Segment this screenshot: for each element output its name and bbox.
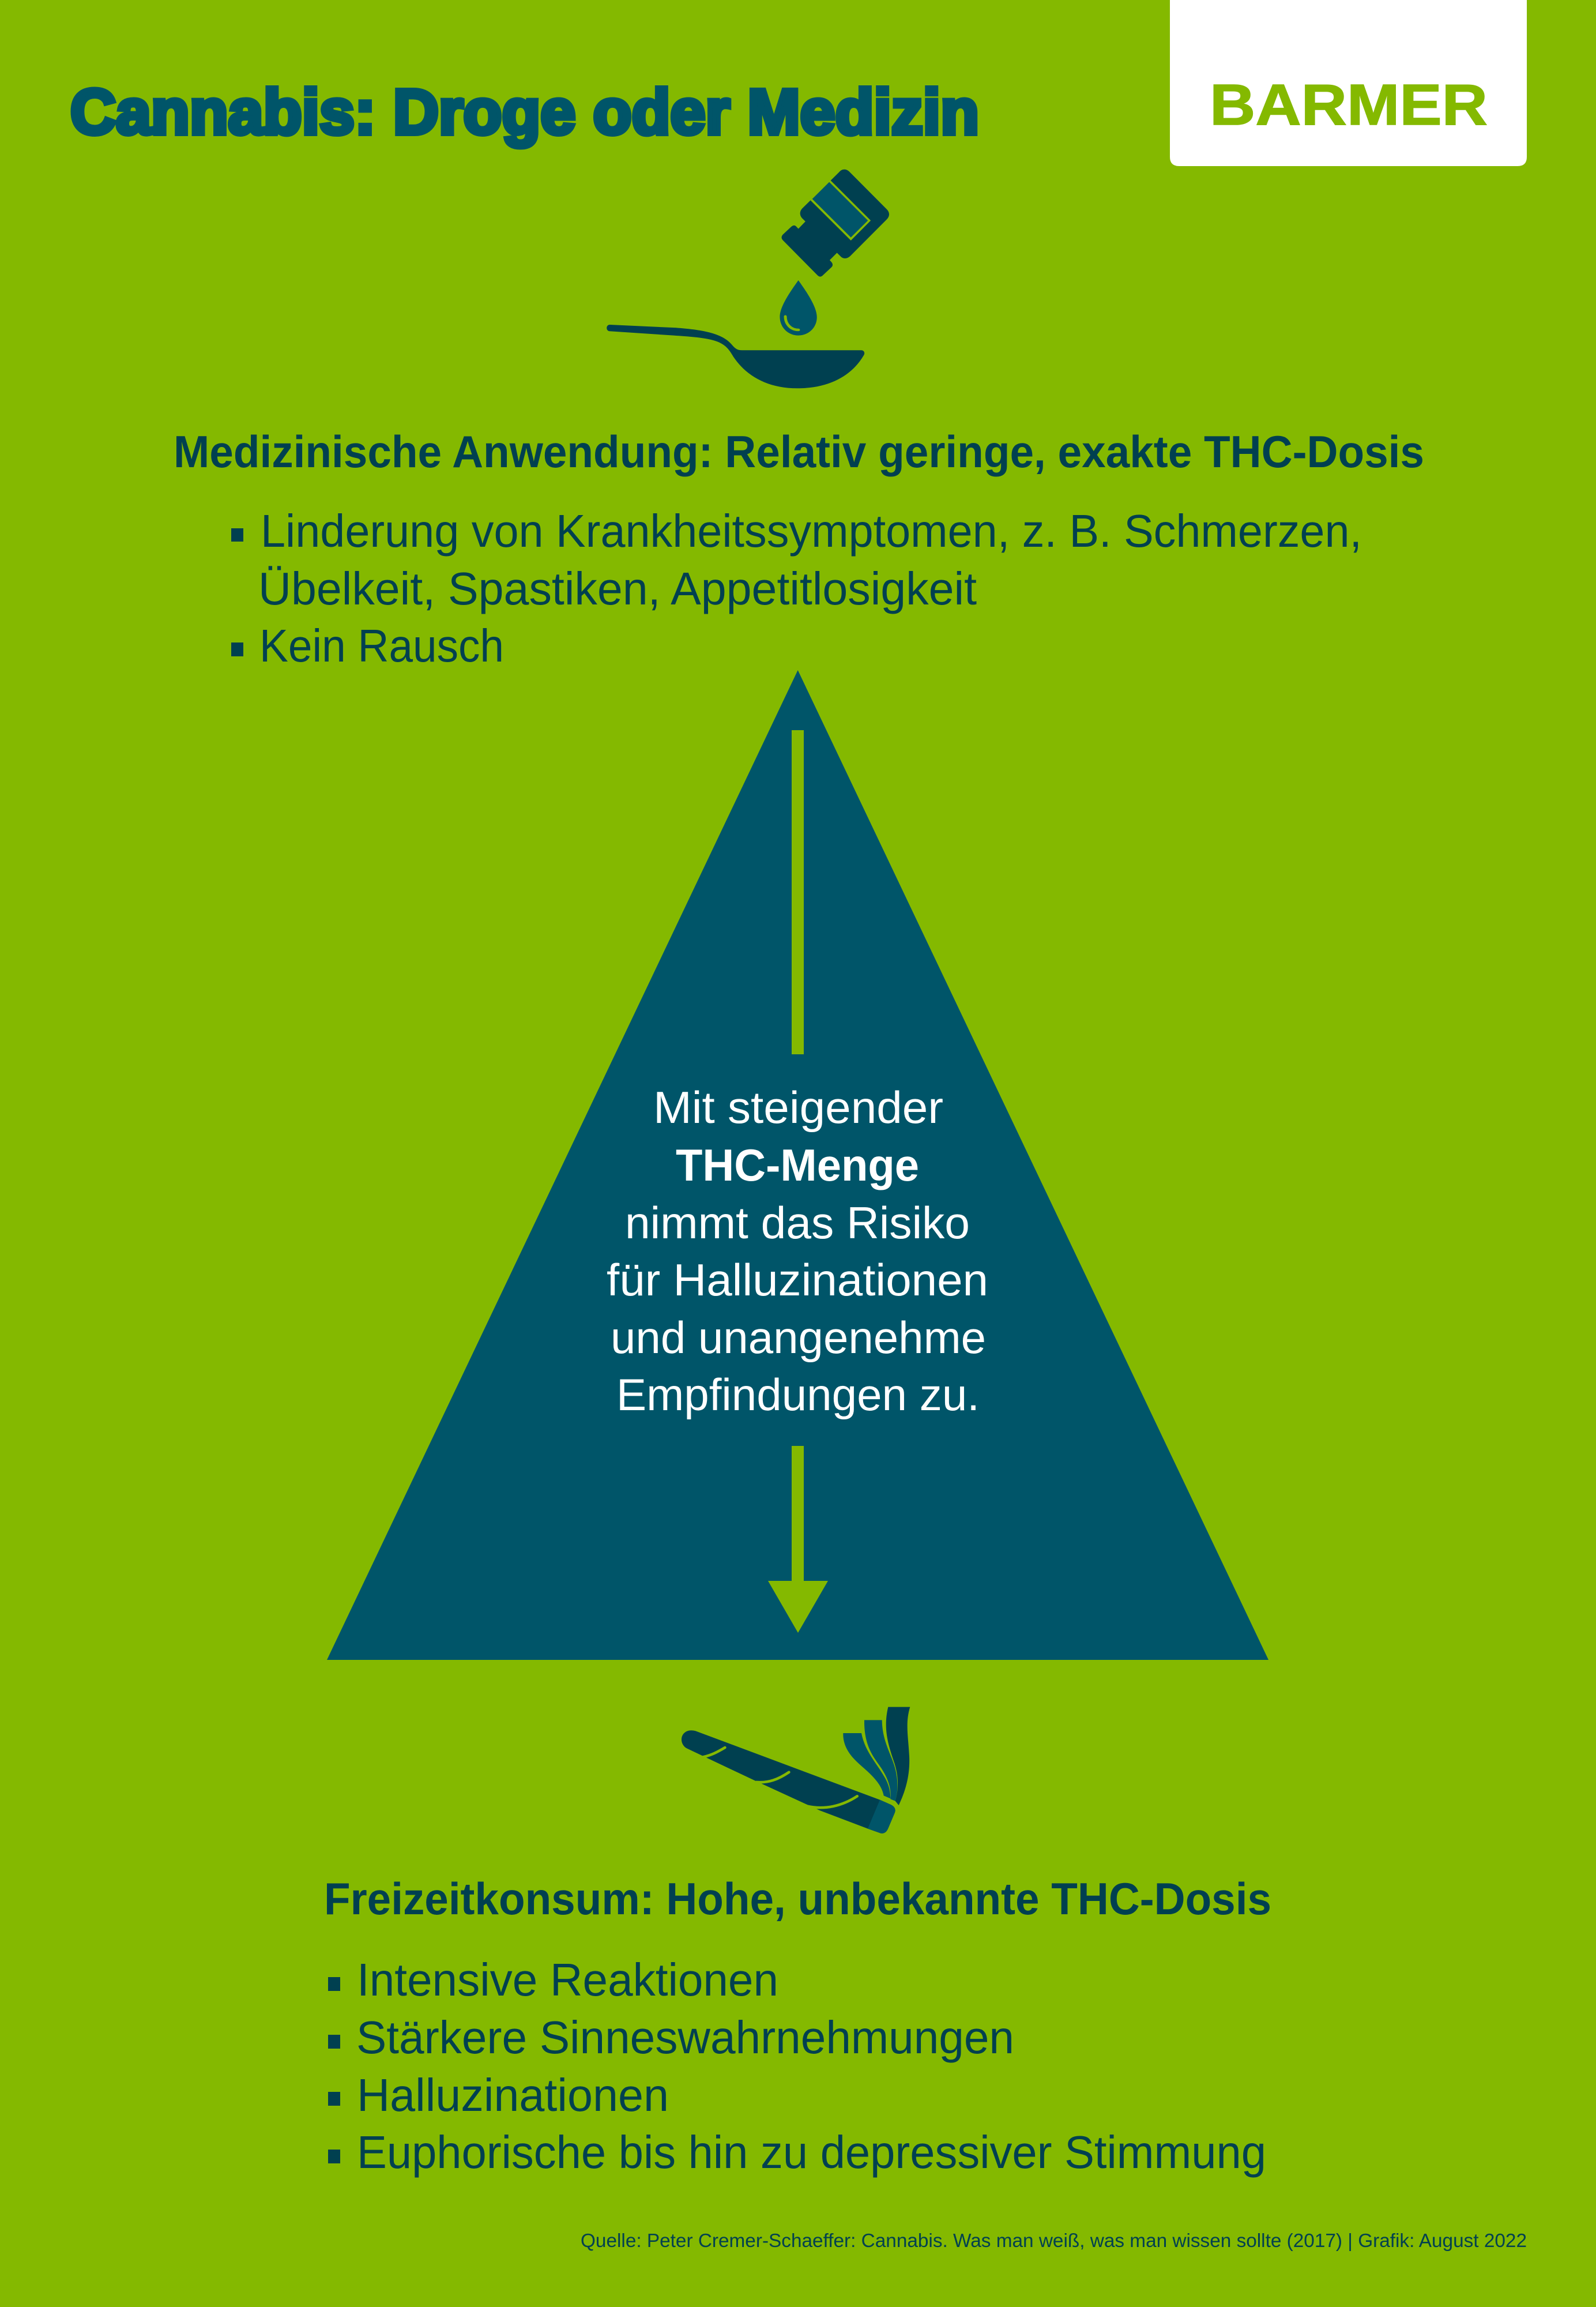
list: medical use [231,505,1362,671]
icon: joint with smoke [682,1707,910,1833]
icon: bottle dripping onto spoon [607,170,889,388]
triangle text: nimmt das Risiko [625,1197,970,1248]
logo: BARMER [1170,0,1527,166]
joint [682,1730,895,1833]
triangle text: THC-Menge [676,1140,919,1190]
heading: recreational use: Freizeitkonsum: Hohe, unbekannte THC-Dosis [324,1873,1271,1924]
list: recreational use [328,1954,1266,2178]
triangle text: Mit steigender [653,1082,943,1133]
list: medical use: Übelkeit, Spastiken, Appetitlosigkeit [258,563,977,614]
list: recreational use: Intensive Reaktionen [357,1954,778,2005]
list: medical use: Linderung von Krankheitssymptomen, z. B. Schmerzen, [261,505,1362,557]
heading: medical use: Medizinische Anwendung: Relativ geringe, exakte THC-Dosis [174,426,1424,477]
smoke [843,1707,910,1805]
title: Cannabis: Droge oder Medizin [70,77,979,148]
list: recreational use: Euphorische bis hin zu depressiver Stimmung [357,2126,1266,2178]
bottle [782,170,889,277]
list: medical use: Kein Rausch [259,620,504,671]
drop [780,280,817,336]
list: recreational use: Halluzinationen [357,2069,669,2121]
triangle panel [327,670,1268,1660]
list: recreational use: Stärkere Sinneswahrnehmungen [356,2012,1014,2063]
triangle text [607,1082,988,1420]
source line: Quelle: Peter Cremer-Schaeffer: Cannabis. Was man weiß, was man wissen sollte (2017) | Grafik: August 2022 [581,2230,1527,2251]
triangle text: und unangenehme [611,1312,986,1363]
logo: BARMER: BARMER [1210,73,1488,137]
arrow: increasing THC [768,730,828,1633]
triangle text: Empfindungen zu. [616,1369,980,1420]
spoon [607,325,864,388]
triangle text: für Halluzinationen [607,1254,988,1305]
